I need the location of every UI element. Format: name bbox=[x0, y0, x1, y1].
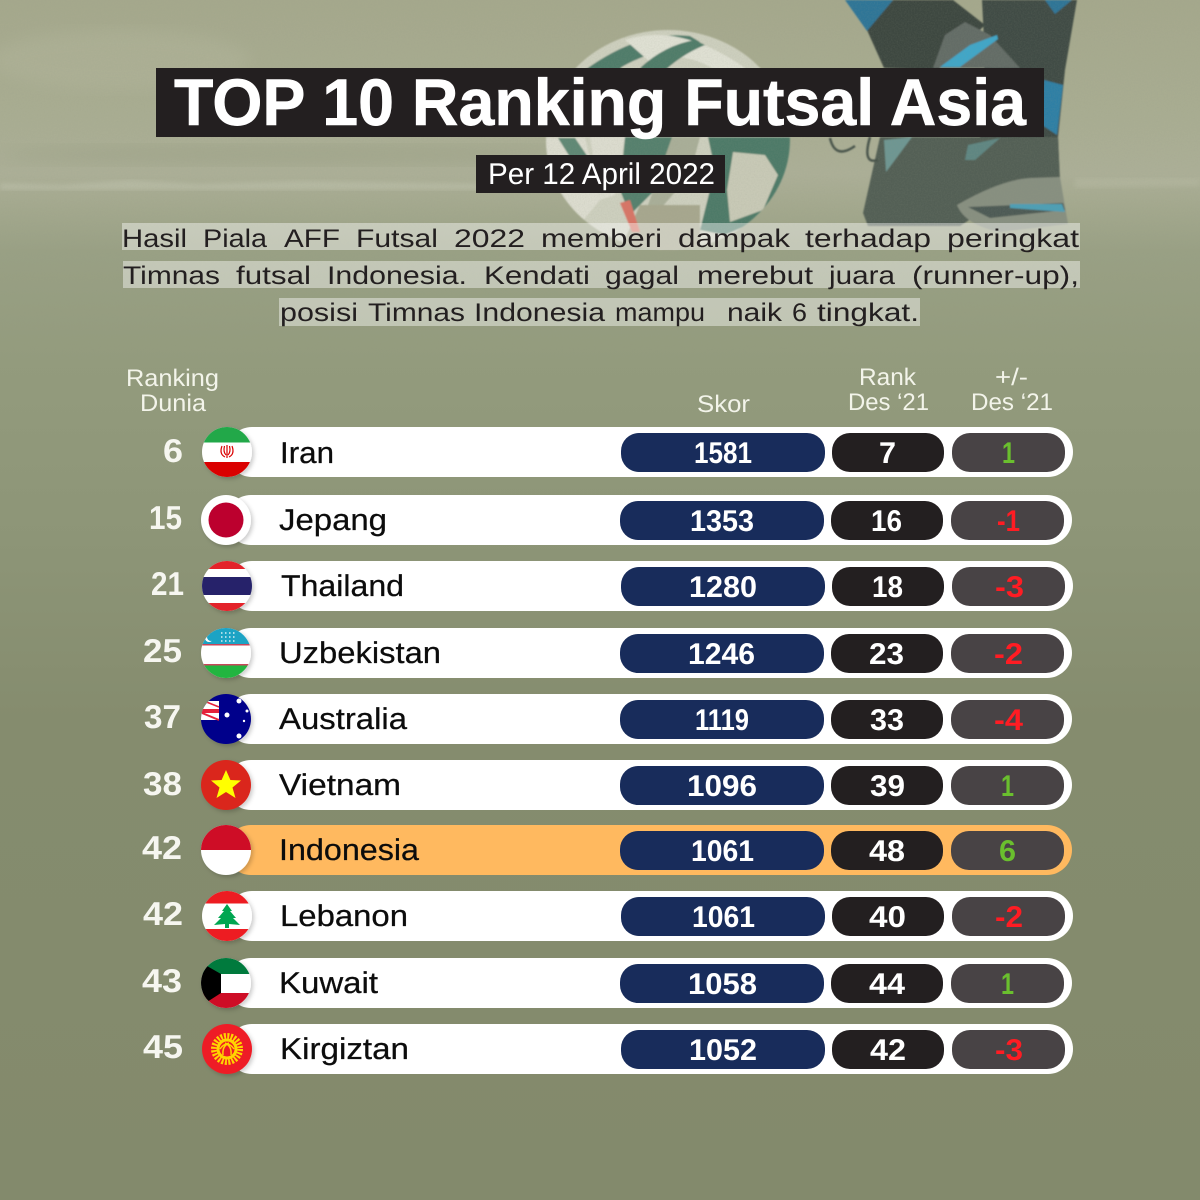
intro paragraph: tingkat. bbox=[817, 299, 919, 327]
subtitle: date: Per 12 April 2022 bbox=[488, 158, 715, 191]
row: Uzbekistan: 25 bbox=[143, 632, 182, 669]
row: Thailand: 18 bbox=[872, 571, 903, 604]
intro paragraph: dampak bbox=[678, 225, 790, 253]
row: Lebanon: 1061 bbox=[692, 901, 755, 934]
row: Uzbekistan bbox=[143, 628, 1072, 678]
illustration: player legs and boots bbox=[830, 0, 1077, 232]
column header: change since December 2021 bbox=[971, 364, 1053, 416]
row: Lebanon: -2 bbox=[995, 901, 1023, 934]
column header: rank December 2021: Des ‘21 bbox=[848, 389, 929, 416]
intro paragraph: juara bbox=[828, 262, 896, 290]
row: Australia: 1119 bbox=[695, 704, 749, 737]
row: Iran: 1581 bbox=[694, 437, 752, 470]
row: Kirgiztan: 1052 bbox=[689, 1034, 757, 1067]
row: Australia: 37 bbox=[144, 698, 181, 735]
row: Thailand: Thailand bbox=[281, 570, 404, 603]
row: Uzbekistan: -2 bbox=[994, 638, 1023, 671]
row: Thailand: -3 bbox=[995, 571, 1024, 604]
row: Lebanon: Lebanon bbox=[280, 900, 408, 933]
intro paragraph: peringkat bbox=[947, 225, 1079, 253]
row: Kuwait bbox=[142, 958, 1072, 1008]
row: Kirgiztan: 45 bbox=[143, 1028, 183, 1065]
intro paragraph: terhadap bbox=[805, 225, 931, 253]
intro paragraph: AFF bbox=[284, 225, 340, 253]
intro paragraph: Hasil bbox=[122, 225, 187, 253]
flag: Jepang bbox=[201, 495, 251, 545]
column header: rank December 2021: Rank bbox=[859, 364, 917, 391]
flag: Lebanon bbox=[202, 891, 252, 941]
column header: score: Skor bbox=[697, 391, 750, 418]
intro paragraph: Indonesia bbox=[474, 299, 606, 327]
row: Vietnam: Vietnam bbox=[279, 769, 401, 802]
intro paragraph: 2022 bbox=[454, 225, 525, 253]
intro paragraph: Indonesia. bbox=[327, 262, 467, 290]
intro paragraph: (runner-up), bbox=[912, 262, 1079, 290]
flag: Uzbekistan bbox=[201, 628, 251, 678]
row: Jepang: 15 bbox=[149, 499, 182, 536]
flag: Iran bbox=[202, 427, 252, 477]
row: Australia: -4 bbox=[994, 704, 1023, 737]
row: Kirgiztan bbox=[143, 1024, 1073, 1074]
row: Iran bbox=[163, 427, 1073, 477]
row: Kirgiztan: 42 bbox=[870, 1034, 906, 1067]
row: Kuwait: 1058 bbox=[688, 968, 757, 1001]
row: Jepang: 1353 bbox=[690, 505, 754, 538]
row: Indonesia (highlighted): Indonesia bbox=[279, 834, 419, 867]
intro paragraph: 6 bbox=[792, 299, 807, 327]
row: Iran: 6 bbox=[163, 432, 183, 469]
row: Australia: Australia bbox=[279, 703, 407, 736]
column header: change since December 2021: +/- bbox=[995, 364, 1028, 391]
row: Lebanon: 42 bbox=[143, 895, 183, 932]
row: Thailand bbox=[151, 561, 1073, 611]
intro paragraph: mampu bbox=[615, 299, 705, 327]
row: Uzbekistan: 23 bbox=[869, 638, 904, 671]
row: Indonesia (highlighted): 6 bbox=[999, 835, 1016, 868]
title: TOP 10 Ranking Futsal Asia bbox=[174, 65, 1027, 139]
row: Australia: 33 bbox=[870, 704, 904, 737]
intro paragraph: Piala bbox=[203, 225, 268, 253]
row: Lebanon bbox=[143, 891, 1073, 941]
row: Indonesia (highlighted): 42 bbox=[142, 829, 182, 866]
column header: change since December 2021: Des ‘21 bbox=[971, 389, 1053, 416]
flag: Indonesia bbox=[201, 825, 251, 875]
row: Vietnam: 1096 bbox=[687, 770, 757, 803]
row: Kuwait: Kuwait bbox=[279, 967, 379, 1000]
intro paragraph: naik bbox=[727, 299, 782, 327]
row: Vietnam bbox=[143, 760, 1072, 810]
row: Kuwait: 43 bbox=[142, 962, 182, 999]
intro paragraph: Kendati bbox=[484, 262, 590, 290]
column header: rank December 2021 bbox=[848, 364, 929, 416]
flag: Thailand bbox=[202, 561, 252, 611]
row: Kuwait: 44 bbox=[869, 968, 905, 1001]
row: Jepang bbox=[149, 495, 1072, 545]
flag: Australia bbox=[201, 694, 251, 744]
intro paragraph: merebut bbox=[697, 262, 813, 290]
row: Vietnam: 1 bbox=[1001, 770, 1014, 803]
row: Jepang: -1 bbox=[997, 505, 1020, 538]
illustration: football bbox=[545, 30, 790, 250]
intro paragraph: Timnas bbox=[368, 299, 465, 327]
row: Lebanon: 40 bbox=[869, 901, 906, 934]
flag: Kirgiztan bbox=[202, 1024, 252, 1074]
texture: film grain bbox=[0, 0, 1200, 360]
row: Indonesia (highlighted) bbox=[142, 825, 1072, 875]
column header: world ranking bbox=[126, 365, 219, 417]
intro paragraph bbox=[122, 223, 1080, 327]
row: Thailand: 21 bbox=[151, 565, 184, 602]
flag: Vietnam bbox=[201, 760, 251, 810]
row: Australia bbox=[144, 694, 1072, 744]
row: Indonesia (highlighted): 48 bbox=[869, 835, 905, 868]
row: Iran: 1 bbox=[1002, 437, 1015, 470]
row: Kuwait: 1 bbox=[1001, 968, 1014, 1001]
intro paragraph: Futsal bbox=[356, 225, 438, 253]
intro paragraph: gagal bbox=[605, 262, 679, 290]
row: Kirgiztan: -3 bbox=[995, 1034, 1023, 1067]
row: Uzbekistan: 1246 bbox=[688, 638, 755, 671]
intro paragraph: memberi bbox=[541, 225, 662, 253]
intro paragraph: Timnas bbox=[123, 262, 220, 290]
row: Vietnam: 39 bbox=[870, 770, 905, 803]
row: Jepang: Jepang bbox=[279, 504, 387, 537]
row: Vietnam: 38 bbox=[143, 765, 182, 802]
row: Kirgiztan: Kirgiztan bbox=[280, 1033, 409, 1066]
row: Indonesia (highlighted): 1061 bbox=[691, 835, 754, 868]
intro paragraph: posisi bbox=[280, 299, 358, 327]
row: Iran: 7 bbox=[879, 437, 896, 470]
row: Thailand: 1280 bbox=[689, 571, 757, 604]
row: Uzbekistan: Uzbekistan bbox=[279, 637, 441, 670]
intro paragraph: futsal bbox=[236, 262, 311, 290]
row: Iran: Iran bbox=[280, 437, 334, 470]
flag: Kuwait bbox=[201, 958, 251, 1008]
column header: world ranking: Ranking bbox=[126, 365, 219, 392]
column header: world ranking: Dunia bbox=[140, 390, 207, 417]
row: Jepang: 16 bbox=[871, 505, 902, 538]
